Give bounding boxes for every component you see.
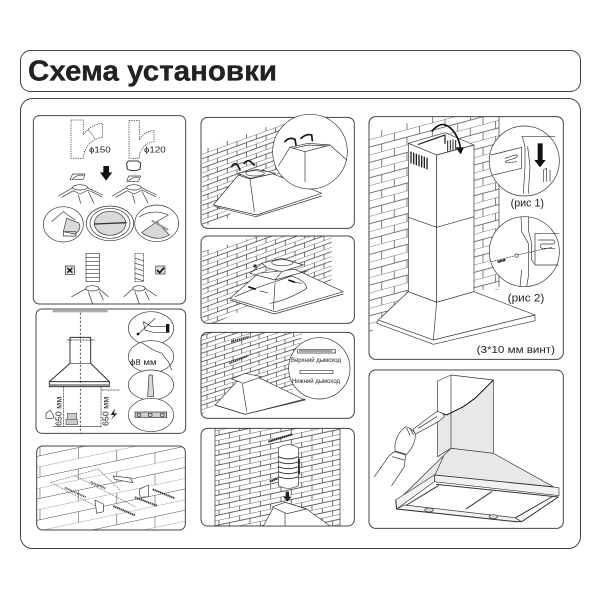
label: fig 1: (рис 1) (511, 198, 544, 210)
hood top (263, 502, 330, 526)
label: diameter 150: ϕ150 (89, 145, 111, 154)
icon: gas (46, 410, 53, 418)
label: 650 mm gas: 650 мм (54, 397, 63, 426)
magnifier circle (289, 338, 350, 399)
title box (20, 50, 580, 92)
icon: wall rails (229, 337, 249, 363)
panel: chimney installation (201, 428, 354, 526)
icon: duct 150 (71, 120, 103, 158)
panel: chimney brackets (201, 332, 354, 418)
panel: protective film removal (369, 370, 563, 528)
label: diameter 120: ϕ120 (144, 145, 166, 154)
icon: hole circle (128, 341, 174, 373)
icon: rails (268, 434, 299, 482)
panel: chimney on hood (369, 117, 563, 359)
chimney (408, 133, 474, 302)
panel: height measurement and drilling (36, 309, 186, 433)
panel: duct diameter and damper (33, 116, 186, 304)
hood (230, 258, 343, 314)
icon: screws (232, 161, 254, 170)
icon: right hood top with adapter (112, 176, 157, 203)
detail circle 1 (489, 126, 559, 196)
panel: wall brackets (37, 446, 185, 530)
icon: curved arrow (432, 125, 464, 154)
icon: flexible duct approved (124, 253, 157, 304)
icon: fixing screw (253, 264, 257, 268)
panel: hood fixing (201, 236, 354, 323)
brick wall (201, 332, 302, 415)
icon: lower brackets and screws (95, 485, 175, 515)
icon: duct 120 (127, 121, 154, 171)
icon: hood front view (49, 337, 120, 427)
icon: duct cylinder (278, 445, 298, 488)
hood (377, 292, 535, 344)
icon: stove (66, 413, 77, 425)
icon: hole circle: ϕ8 мм (130, 357, 157, 367)
icon: hand with tool (374, 412, 444, 486)
ceiling line (53, 310, 108, 312)
icon: electric bolt (111, 408, 117, 420)
label: fig 2: (рис 2) (508, 292, 544, 304)
title: Схема установки (28, 56, 277, 88)
icon: left hood top with damper (58, 174, 103, 203)
icon: level circle (128, 398, 174, 432)
icon: rigid duct crossed (72, 253, 108, 304)
brick wall (37, 446, 185, 530)
icon: wall plug circle (128, 370, 174, 400)
icon: upper bracket (298, 350, 336, 353)
chimney with film (438, 375, 493, 457)
brick wall (215, 428, 340, 526)
icon: lower bracket (300, 370, 333, 374)
hood (213, 169, 322, 217)
icon: drill circle (128, 312, 174, 345)
icon: check mark box (156, 266, 165, 274)
icon: down arrow (100, 166, 112, 181)
panel: hood on wall (201, 114, 354, 228)
brick wall (202, 236, 332, 323)
hood body (396, 448, 559, 522)
icon: damper detail circles (43, 205, 179, 242)
brick wall (370, 117, 499, 337)
icon: cross mark box (65, 266, 74, 274)
label: 650 mm electric: 650 мм (102, 397, 111, 426)
main frame (20, 98, 580, 548)
center line (79, 313, 82, 433)
icon: down arrow (283, 492, 292, 502)
label: lower duct: Нижний дымоход (292, 378, 341, 385)
brick wall (202, 123, 288, 227)
hood (215, 373, 305, 414)
magnifier circle (273, 114, 347, 189)
label: upper duct: Верхний дымоход (291, 357, 342, 364)
label: screw size: (3*10 мм винт) (477, 345, 555, 356)
detail circle 2 (489, 217, 559, 287)
icon: upper bracket and screws (51, 469, 135, 507)
